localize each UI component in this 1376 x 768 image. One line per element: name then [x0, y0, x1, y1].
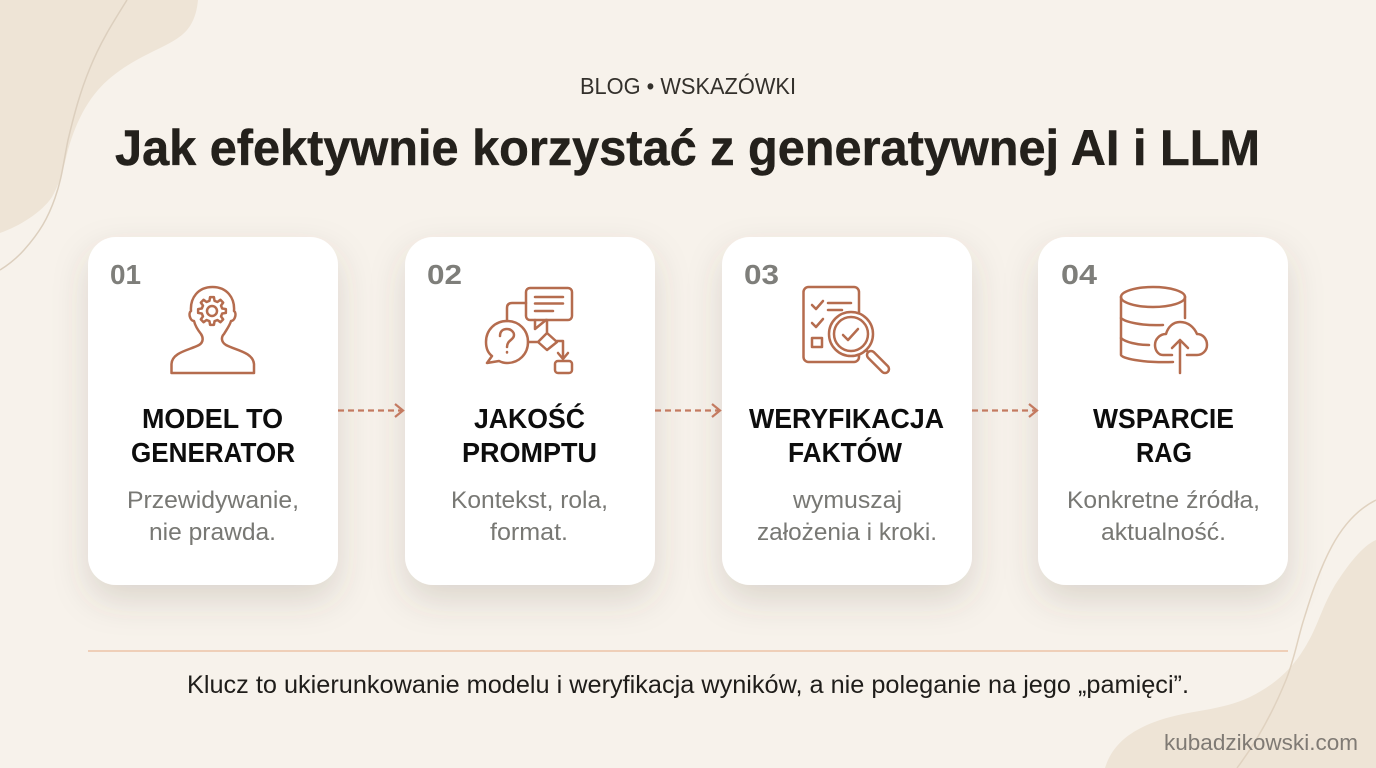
heading 03: FAKTÓW: [788, 437, 903, 468]
description 03: [757, 487, 937, 546]
description 04: Konkretne źródła,: [1067, 487, 1260, 514]
arrow: card 01 to 02: [338, 404, 403, 417]
heading 01: [131, 403, 295, 468]
heading 04: [1093, 403, 1234, 468]
heading 03: WERYFIKACJA: [749, 403, 944, 434]
step number 03: 03: [744, 259, 779, 290]
panel: card 03: [722, 237, 972, 585]
description 02: format.: [490, 519, 568, 546]
description 04: aktualność.: [1101, 519, 1226, 546]
description 01: Przewidywanie,: [127, 487, 299, 514]
heading 02: PROMPTU: [462, 437, 597, 468]
heading 02: [462, 403, 597, 468]
description 04: [1067, 487, 1260, 546]
arrow: card 02 to 03: [655, 404, 720, 417]
eyebrow label: BLOG • WSKAZÓWKI: [580, 73, 796, 99]
heading 04: WSPARCIE: [1093, 403, 1234, 434]
footer statement: Klucz to ukierunkowanie modelu i weryfikacja wyników, a nie poleganie na jego „pamięci”.: [187, 671, 1189, 699]
step number 04: 04: [1061, 259, 1097, 290]
description 03: założenia i kroki.: [757, 519, 937, 546]
icon: database with cloud upload: [1121, 287, 1207, 373]
heading 01: GENERATOR: [131, 437, 295, 468]
icon: checklist with magnifier: [804, 287, 885, 369]
description 01: nie prawda.: [149, 519, 276, 546]
heading 03: [749, 403, 944, 468]
description 02: [451, 487, 608, 546]
decorative blob: top left: [0, 0, 198, 270]
title: Jak efektywnie korzystać z generatywnej AI i LLM: [115, 120, 1260, 176]
step number 02: 02: [427, 259, 462, 290]
panel: card 01: [88, 237, 338, 585]
panel: card 02: [405, 237, 655, 585]
arrow: card 03 to 04: [972, 404, 1037, 417]
step number 01: 01: [110, 259, 141, 290]
decorative blob: bottom right: [1105, 500, 1376, 768]
heading 01: MODEL TO: [142, 403, 283, 434]
description 01: [127, 487, 299, 546]
description 02: Kontekst, rola,: [451, 487, 608, 514]
website credit: kubadzikowski.com: [1164, 730, 1358, 755]
heading 04: RAG: [1136, 437, 1192, 468]
icon: head with gear: [172, 287, 254, 373]
heading 02: JAKOŚĆ: [474, 403, 585, 434]
icon: question bubble and flow: [486, 288, 572, 373]
description 03: wymuszaj: [792, 487, 902, 514]
panel: card 04: [1038, 237, 1288, 585]
